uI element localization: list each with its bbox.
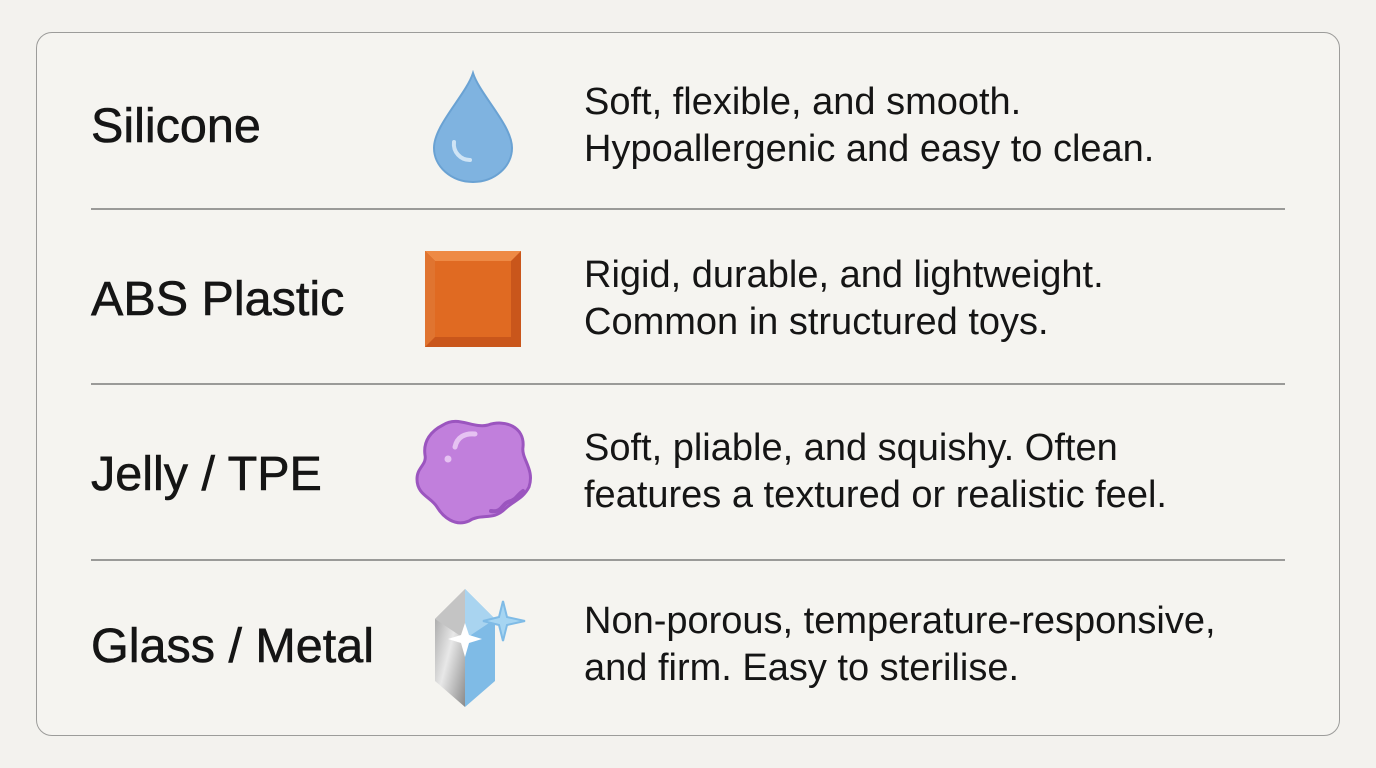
text: ABS description: Common in structured toys. (584, 301, 1049, 343)
text: silicone description (584, 81, 1154, 170)
heading: ABS Plastic: ABS Plastic (91, 272, 344, 326)
icon: jelly blob (416, 420, 532, 524)
text: jelly description: features a textured or realistic feel. (584, 474, 1167, 516)
heading: Glass / Metal: Glass / Metal (91, 619, 374, 673)
text: silicone description: Soft, flexible, and smooth. (584, 81, 1021, 123)
text: silicone description: Hypoallergenic and easy to clean. (584, 128, 1154, 170)
icon: crystal (435, 589, 526, 707)
text: ABS description: Rigid, durable, and lightweight. (584, 254, 1104, 296)
heading: Silicone: Silicone (91, 99, 261, 153)
icon: orange cube (425, 251, 521, 347)
text: ABS description (584, 254, 1104, 343)
icon: water drop (433, 70, 513, 183)
text: glass/metal description: Non-porous, temperature-responsive, (584, 600, 1216, 642)
heading: Jelly / TPE: Jelly / TPE (91, 447, 322, 501)
text: jelly description (584, 427, 1167, 516)
text: glass/metal description: and firm. Easy to sterilise. (584, 647, 1019, 689)
text: glass/metal description (584, 600, 1216, 689)
text: jelly description: Soft, pliable, and squishy. Often (584, 427, 1118, 469)
